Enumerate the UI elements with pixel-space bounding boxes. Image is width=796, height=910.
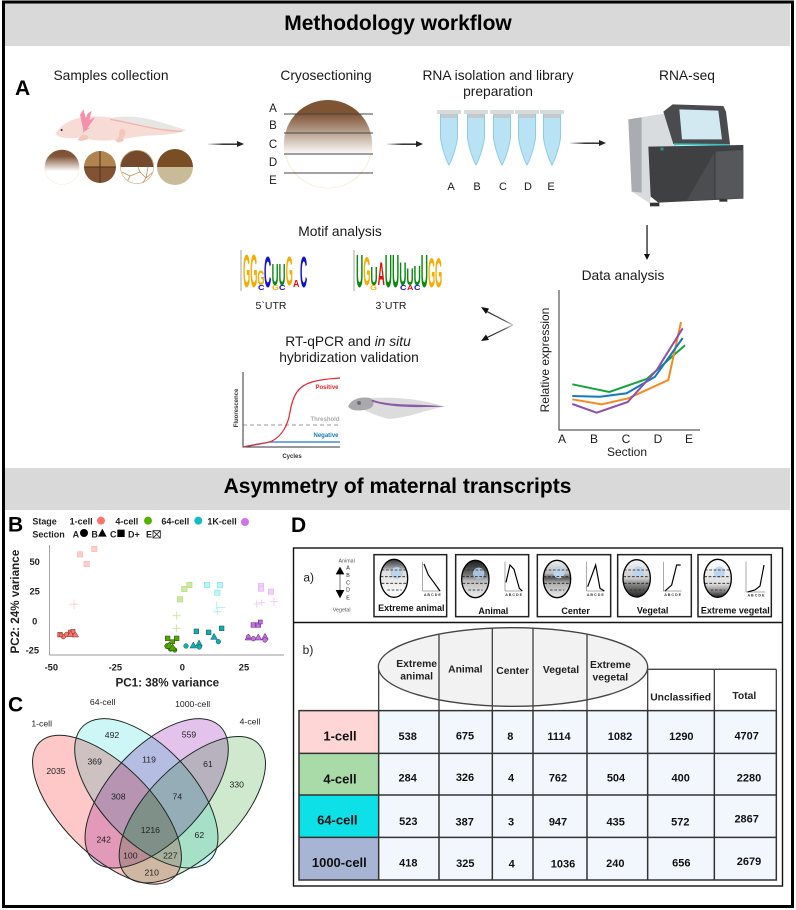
header labels: Animal [448,665,483,676]
step: data analysis [538,268,700,459]
row: 1-cell: 1114 [547,731,571,743]
sub-panel b: transcript count table [299,628,776,880]
row: 4-cell: 326 [456,772,474,784]
row: 4-cell: 504 [607,773,626,785]
line chart: relative expression: E [685,432,693,446]
legend: D+ [128,529,140,539]
sequence logo: 3'UTR: U [399,258,406,293]
step: motif analysis [241,224,442,312]
set labels [31,697,260,728]
icon: tube E [540,110,564,165]
arrow: cryosectioning to RNA isolation [387,141,423,147]
axis key: animal to vegetal: C [346,581,350,587]
axis key: animal to vegetal: E [346,595,350,601]
legend: B [91,529,98,539]
card: vegetal [618,555,691,617]
row: 4-cell: 4-cell [323,772,357,787]
icon: 4-cell egg [84,151,116,183]
section labels: B [269,120,277,132]
row: 64-cell [317,812,759,828]
arrow: RNA-seq to data analysis [644,225,650,260]
row: 4-cell: 2280 [737,772,761,784]
line chart: relative expression: A [558,432,566,446]
row: 1000-cell: 656 [672,858,690,870]
venn counts: 369 [87,757,102,767]
points: 1-cell [58,546,97,639]
chart: RT-qPCR amplification curve: Cycles [282,454,302,460]
row: 1-cell: 1290 [669,731,694,743]
axes: 0 [180,663,185,673]
venn counts: 74 [173,791,182,801]
row: 1-cell [323,729,759,744]
row: 1000-cell: 1036 [551,858,575,870]
heading: RNA-seq: RNA-seq [659,68,715,83]
axes: -50 [45,663,58,673]
sequence logo: 5'UTR: C [279,284,286,292]
legend: 1K-cell [207,516,237,526]
heading: RT-qPCR: hybridization validation [279,350,419,365]
chart: RT-qPCR amplification curve: Threshold [310,417,340,423]
tube labels: E [547,181,555,193]
header labels [396,659,756,703]
row: 4-cell [323,772,761,787]
legend: 1-cell [70,516,93,526]
heading: cryosectioning: Cryosectioning [280,68,372,83]
tube labels: D [524,181,532,193]
card: extreme animal [374,555,447,617]
sequence logo: 5'UTR: G [286,249,293,295]
axis key: animal to vegetal: B [346,573,350,579]
set labels: 64-cell [90,697,115,707]
row: 4-cell: 762 [549,773,567,785]
icon: tube C [490,110,514,165]
heading: data analysis: Data analysis [582,268,665,283]
points: 4-cell [165,582,192,652]
sequence logo: 5'UTR: C [300,247,307,297]
panel letter D: D [291,514,306,537]
axis key: animal to vegetal: A [346,566,350,572]
venn counts: 210 [144,867,159,877]
arrow: samples to cryosectioning [208,141,244,147]
sequence logo: 3'UTR: G [370,284,377,292]
points: 64-cell [184,582,226,649]
sequence logo: 3'UTR: A [378,258,385,293]
venn counts: 308 [111,791,126,801]
sequence logo: 5'UTR: U [272,257,278,292]
heading: samples collection: Samples collection [53,68,169,83]
heading band: asymmetry of maternal transcripts [5,468,790,510]
section labels: A [269,103,277,115]
row: 1-cell: 538 [399,731,417,743]
chart: RT-qPCR amplification curve: Positive [315,385,339,391]
heading band: methodology workflow [5,4,790,46]
header labels: vegetal [593,673,628,684]
legend: A [73,529,80,539]
card: extreme animal: A B C D E [424,593,441,597]
axes: 25 [239,663,249,673]
venn counts: 1216 [141,825,160,835]
header labels: Extreme [590,660,631,671]
header labels: Total [732,691,756,702]
card: animal [456,555,529,617]
set labels: 1000-cell [175,699,210,709]
row: 64-cell: 947 [549,816,567,828]
axes: 25 [29,586,40,596]
venn counts: 2035 [46,766,66,776]
card: extreme vegetal: Extreme vegetal [701,605,770,615]
panel D frame [294,548,782,886]
row: 1-cell: 1082 [608,731,632,743]
sequence logo: 3'UTR: G [363,251,370,295]
row: 1000-cell: 325 [456,858,474,870]
legend: E [146,529,152,539]
section labels: C [269,139,277,151]
step: RT-qPCR and in situ validation [234,334,445,460]
row: 1000-cell [312,855,761,870]
legend: 64-cell [161,516,189,526]
sequence logo: 3'UTR: C [414,284,421,292]
tube labels: A [447,181,455,193]
row: 1-cell: 675 [456,731,474,743]
venn counts: 227 [163,850,178,860]
diagram: sectioned egg [284,100,373,188]
sequence logo: 5'UTR: A [293,279,300,290]
legend: 4-cell [115,516,138,526]
venn counts: 62 [195,830,204,840]
icon: tube D [515,110,539,165]
panel A: methodology workflow [15,68,743,460]
panel letter C: C [8,694,23,717]
sub-panel a: localization patterns [303,555,771,617]
section labels: E [269,175,277,187]
line chart: relative expression: Section [607,445,647,459]
header labels: animal [400,672,433,683]
sequence logo: 3'UTR: U [356,247,363,298]
sequence logo: 5'UTR [241,247,307,298]
tube labels [447,181,555,193]
sequence logo: 3'UTR: U [421,247,428,298]
sequence logo: 5'UTR: G [250,247,257,298]
sequence logo: 5'UTR: U [279,257,285,292]
icon: tube A [437,110,461,165]
card: center: A B C D E [587,593,604,597]
icon: 1000-cell egg [157,149,193,185]
legend: C [110,529,117,539]
axes: 50 [29,557,40,567]
legend: Stage [32,516,57,526]
venn sets [32,718,266,885]
row: 4-cell: 284 [399,772,418,784]
legend [32,516,249,539]
sequence logo: 3'UTR: U [385,247,392,298]
heading: RNA isolation [422,68,574,99]
panel D: classification of transcripts [291,514,782,886]
axes: 0 [32,617,37,627]
sequence logo: 3'UTR: U [392,247,399,298]
step: RNA-seq [628,68,743,206]
axis key: animal to vegetal: Animal [339,559,355,565]
venn counts: 61 [203,759,213,769]
sequence logo: 5'UTR: G [272,284,279,292]
row: 1000-cell: 2679 [737,856,761,868]
icon: sequencing machine [628,104,743,206]
row: 64-cell: 2867 [734,814,759,826]
set labels: 4-cell [240,716,260,726]
row: 1-cell: 8 [507,731,513,743]
header labels: Extreme [396,659,437,670]
heading: RT-qPCR: RT-qPCR and in situ [285,334,411,349]
heading band: asymmetry of maternal transcripts: Asymmetry of maternal transcripts [224,475,571,498]
line chart: relative expression: Relative expression [538,308,552,412]
step: samples collection [44,68,193,185]
heading: RNA isolation: RNA isolation and library [422,68,574,83]
chart: RT-qPCR amplification curve [234,372,340,460]
card: extreme animal: Extreme animal [378,603,445,613]
row: 4-cell: 4 [508,773,515,785]
line chart: relative expression [538,290,700,459]
label a): a) [303,571,314,585]
axis key: animal to vegetal [333,559,355,613]
panel letter A: A [15,77,30,100]
step: cryosectioning [269,68,373,188]
axis key: animal to vegetal: Vegetal [333,607,351,613]
row: 64-cell: 64-cell [317,812,358,827]
row: 1000-cell: 4 [509,858,516,870]
venn counts: 100 [123,850,138,860]
line chart: relative expression: D [654,432,663,446]
header labels: Unclassified [650,692,711,703]
line chart: relative expression: C [622,432,631,446]
icon: tube B [464,110,488,165]
row: 4-cell: 400 [671,773,690,785]
axes: -25 [26,645,39,655]
card: center [537,555,611,617]
heading band: methodology workflow: Methodology workflow [284,12,512,35]
card: vegetal: Vegetal [637,605,668,615]
tube labels: B [473,181,481,193]
venn counts: 119 [142,754,156,764]
label b): b) [303,643,313,657]
icon: axolotl [55,109,187,143]
sequence logo: 3'UTR: U [370,263,378,292]
line chart: relative expression: B [590,432,598,446]
row: 1000-cell: 240 [606,858,624,870]
panel letter B: B [8,514,23,537]
axes: -25 [109,663,122,673]
venn counts: 242 [96,835,111,845]
step: RNA isolation and library preparation [422,68,574,193]
venn counts: 559 [182,730,196,740]
row: 1000-cell: 1000-cell [312,855,367,870]
row: 64-cell: 387 [456,816,474,828]
sequence logo: 3'UTR: U [406,263,414,290]
axes: PC2: 24% variance [9,549,22,654]
axes [9,545,284,690]
row: 64-cell: 523 [399,816,417,828]
label: 5'UTR: 5`UTR [256,300,287,312]
points: 1K-cell [245,583,278,642]
row: 1-cell: 1-cell [323,729,357,744]
sequence logo: 3'UTR: G [435,250,442,297]
set labels: 1-cell [31,718,52,728]
sequence logo: 3'UTR: A [407,284,414,292]
axis key: animal to vegetal: D [346,588,350,594]
venn counts: 492 [105,730,119,740]
table grid [299,711,776,880]
label: 3'UTR: 3`UTR [376,300,407,312]
heading: RT-qPCR [279,334,419,365]
sequence logo: 5'UTR: G [257,267,265,290]
venn counts [46,730,244,877]
row: 1-cell: 4707 [734,731,759,743]
sequence logo: 5'UTR: C [264,247,271,297]
card: vegetal: A B C D E [664,593,682,597]
card: animal: Animal [478,606,508,616]
header labels: Center [496,666,529,677]
icon: 1-cell egg [44,150,80,184]
sequence logo: 3'UTR: C [400,284,407,292]
icon: 64-cell egg [120,150,154,184]
row: 64-cell: 435 [606,816,625,828]
row: 64-cell: 572 [671,816,689,828]
header labels: Vegetal [543,665,579,676]
card: animal: A B C D E [505,593,523,597]
chart: RT-qPCR amplification curve: Fluorescence [234,388,240,427]
heading: motif analysis: Motif analysis [298,224,382,239]
icon: tadpole in situ [348,397,445,419]
section labels [269,103,277,187]
chart: RT-qPCR amplification curve: Negative [313,433,339,439]
heading: RNA isolation: preparation [463,84,533,99]
tube labels: C [499,181,507,193]
sequence logo: 3'UTR [354,247,442,298]
sequence logo: 3'UTR: U [414,261,421,292]
header: column boxes [378,628,776,711]
venn counts: 330 [229,779,244,789]
axes: PC1: 38% variance [115,677,220,690]
sequence logo: 5'UTR: G [243,247,250,298]
sequence logo: 3'UTR: G [428,250,435,297]
arrows: data analysis to validation steps [481,307,513,341]
panel C: Venn diagram [8,697,266,885]
sequence logo: 5'UTR: C [258,284,265,292]
row: 64-cell: 3 [508,816,514,828]
card: center: Center [561,606,590,616]
card: extreme vegetal [698,555,771,617]
row: 1000-cell: 418 [399,858,417,870]
arrow: RNA isolation to RNA-seq [570,140,606,146]
section labels: D [269,157,277,169]
card: extreme vegetal: A B C D E [748,594,765,598]
legend: Section [32,529,65,539]
panel B: PCA scatter plot [8,514,284,690]
